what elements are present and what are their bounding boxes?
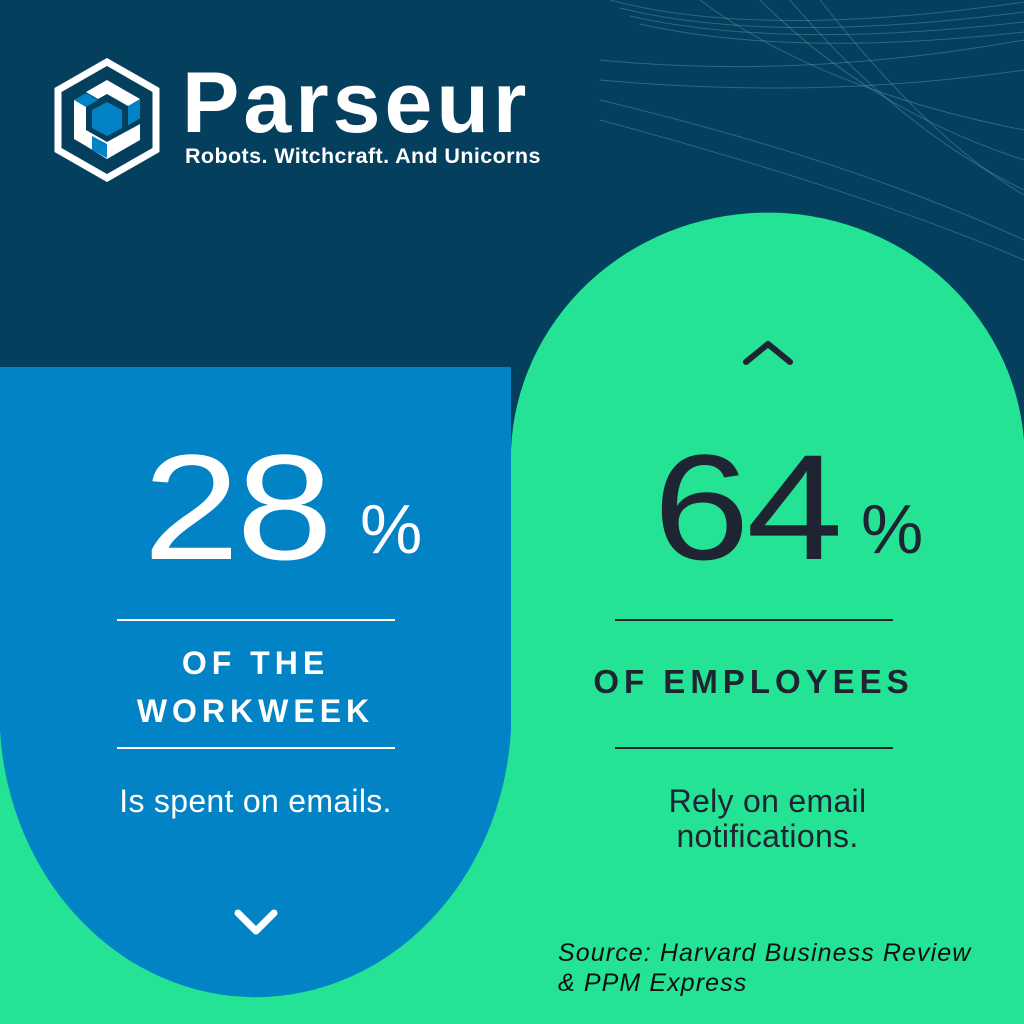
source: Source: Harvard Business Review [558,939,971,967]
icon: chevron down [234,910,278,934]
logo [54,55,541,182]
heading [136,645,374,729]
source: & PPM Express [558,969,747,997]
percent: % [861,490,923,568]
text: Is spent on emails. [119,783,392,819]
tagline: Robots. Witchcraft. And Unicorns [185,144,541,168]
heading: WORKWEEK [137,693,374,729]
text: notifications. [676,818,859,854]
panel: left stat [117,423,422,934]
source [558,939,972,997]
percent: % [360,490,422,568]
blue panel [0,367,511,997]
text: Rely on email [669,783,866,819]
heading: OF THE [182,645,329,681]
logo text: Parseur [182,55,530,151]
number 28: 28 [143,423,330,591]
text [669,783,866,854]
panel: right stat [593,340,923,854]
icon: hexagon [54,58,160,182]
number 64: 64 [653,423,840,591]
heading: OF EMPLOYEES [593,663,914,700]
icon: chevron up [743,340,793,365]
green area [511,213,1024,1024]
